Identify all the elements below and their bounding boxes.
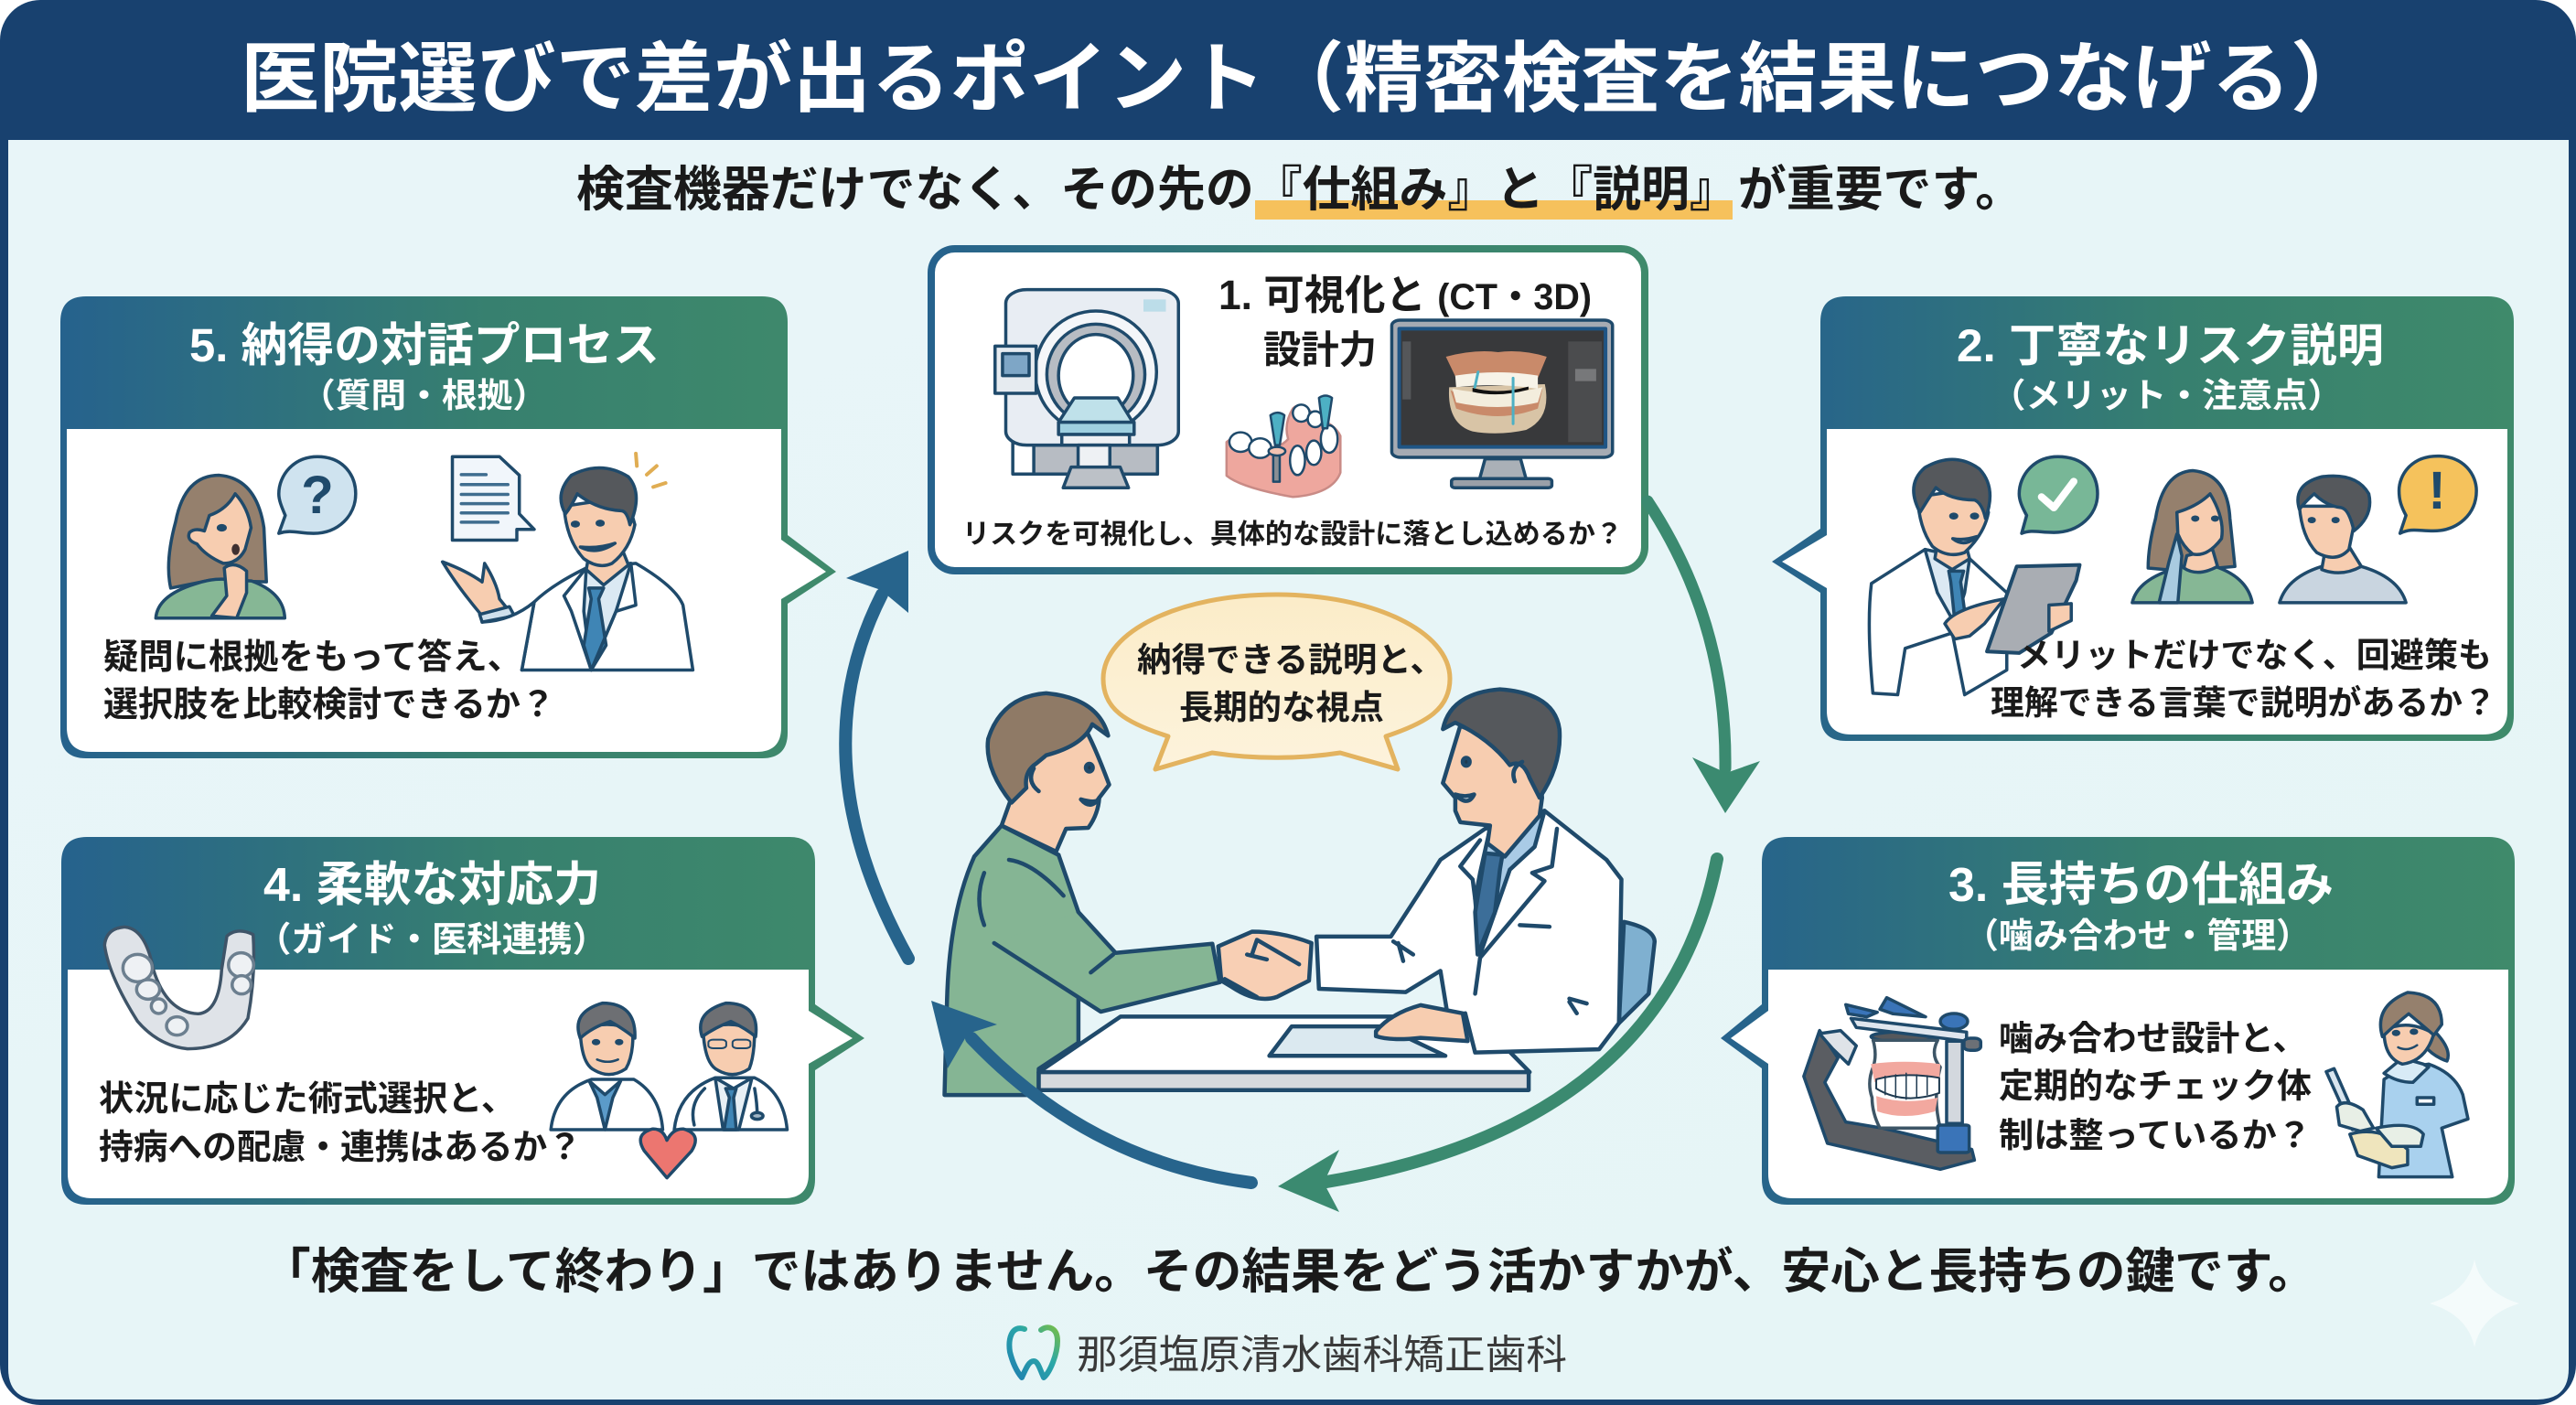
sparkle (2430, 1260, 2519, 1347)
text: body line 2: 選択肢を比較検討できるか？ (103, 686, 555, 724)
text: body line 2: 持病への配慮・連携はあるか？ (99, 1129, 582, 1167)
subtitle with highlights: 検査機器だけでなく、その先の『仕組み』と『説明』が重要です。 (576, 163, 2023, 217)
subheading: （ガイド・医科連携） (256, 921, 607, 960)
doctor body (1316, 810, 1621, 1053)
center illustration: handshake (945, 690, 1655, 1095)
arrow: panel 3 to centre bottom (1278, 859, 1717, 1212)
icon: tooth logo (1009, 1327, 1057, 1378)
bubble text line 2: 長期的な視点 (1179, 689, 1384, 726)
arrow: bottom to panel 4 (931, 1001, 1251, 1183)
bubble text: 納得できる説明と、 (1137, 641, 1444, 679)
doctor lapels (1393, 829, 1587, 1014)
illustration: man (2280, 476, 2406, 603)
heading: 1. 可視化と (CT・3D) (1218, 272, 1592, 318)
panel: 3 longevity system (1721, 837, 2515, 1205)
illustration: clear aligner (104, 927, 253, 1049)
subheading: （メリット・注意点） (1991, 377, 2343, 414)
panel: 5 dialogue process (60, 296, 836, 758)
doctor hair (1443, 690, 1560, 798)
cycle arrows (845, 501, 1760, 1212)
heading: 3. 長持ちの仕組み (1948, 859, 2334, 912)
icon: warning bubble (2399, 456, 2476, 533)
text: body: 状況に応じた術式選択と、 (99, 1080, 516, 1119)
handshake (1218, 932, 1312, 999)
text: body: 噛み合わせ設計と、 (1999, 1019, 2307, 1057)
heading: 4. 柔軟な対応力 (263, 859, 601, 912)
text: body: リスクを可視化し、具体的な設計に落とし込めるか？ (962, 520, 1623, 550)
arrow: panel 4 to panel 5 (845, 551, 908, 959)
text: body: 疑問に根拠をもって答え、 (103, 638, 522, 677)
title: 医院選びで差が出るポイント（精密検査を結果につなげる） (241, 36, 2369, 122)
illustration: woman (2132, 470, 2252, 603)
clinic name: 那須塩原清水歯科矯正歯科 (1077, 1333, 1567, 1378)
doctor neck and face (1443, 726, 1542, 856)
patient neck and face (1002, 726, 1110, 852)
doctor hand on table (1376, 1005, 1467, 1041)
illustration: hygienist (2326, 992, 2468, 1177)
panel: 1 visualization (931, 249, 1645, 571)
illustration: two doctors (551, 1003, 787, 1130)
clipboard (1270, 1026, 1445, 1056)
icon: question mark: ? (301, 466, 334, 525)
illustration: monitor with 3D jaw (1391, 320, 1613, 488)
illustration: implant model (1227, 395, 1340, 497)
illustration: woman with question (156, 456, 356, 618)
panel: 2 risk explanation (1772, 296, 2514, 741)
illustration: articulator (1804, 998, 1980, 1169)
table (1039, 1016, 1530, 1090)
text: body line 2: 理解できる言葉で説明があるか？ (1991, 684, 2496, 722)
heading line 2: 設計力 (1263, 328, 1377, 371)
text: body line 3: 制は整っているか？ (1999, 1116, 2312, 1154)
doctor face details (1455, 758, 1522, 801)
icon: heart (640, 1129, 695, 1178)
panel: 4 flexibility (61, 837, 864, 1205)
subheading: （質問・根拠） (300, 377, 548, 414)
illustration: doctor with tablet (1869, 456, 2098, 695)
heading: 5. 納得の対話プロセス (189, 319, 660, 371)
closing statement: 「検査をして終わり」ではありません。その結果をどう活かすかが、安心と長持ちの鍵です。 (262, 1245, 2317, 1299)
patient hair (988, 693, 1108, 802)
icon: exclamation mark: ! (2428, 461, 2446, 520)
patient arm (994, 912, 1219, 1012)
arrow: panel 1 to 3 (1648, 501, 1760, 813)
heading: 2. 丁寧なリスク説明 (1957, 320, 2384, 371)
doctor shirt (1476, 810, 1544, 955)
icon: document (453, 456, 534, 541)
text: body line 2: 定期的なチェック体 (1999, 1067, 2313, 1105)
illustration: doctor explaining (443, 454, 692, 670)
doctor tie (1476, 853, 1502, 955)
chair (1619, 922, 1655, 1024)
patient body (945, 825, 1079, 1095)
patient face details (1031, 764, 1100, 805)
speech bubble: centre (1103, 595, 1450, 769)
text: body: メリットだけでなく、回避策も (2017, 637, 2492, 674)
logo (1009, 1327, 1567, 1378)
subheading: （噛み合わせ・管理） (1964, 917, 2311, 956)
illustration: CT scanner (995, 290, 1178, 488)
